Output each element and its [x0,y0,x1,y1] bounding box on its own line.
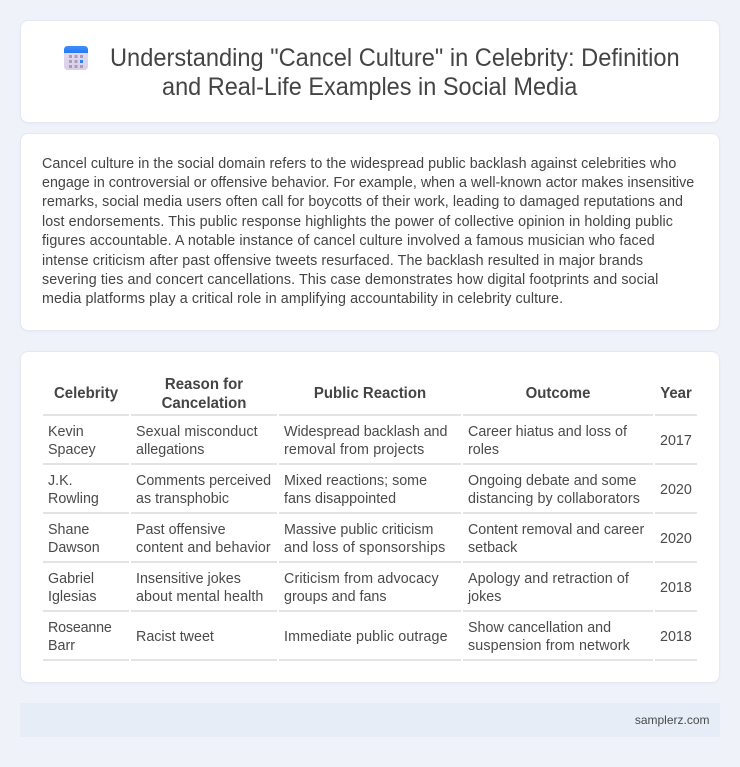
table row: Roseanne Barr: Barr [48,638,75,654]
table row: Roseanne Barr: Immediate public outrage [284,629,448,645]
table row: Roseanne Barr: Racist tweet [136,629,214,645]
table row: Gabriel Iglesias: groups and fans [284,589,387,605]
panel: header [20,20,720,123]
footer [20,703,720,737]
table row: Gabriel Iglesias: about mental health [136,589,264,605]
table row: Shane Dawson [48,522,692,556]
footer credit: samplerz.com [635,713,710,727]
table row: Gabriel Iglesias: Criticism from advocacy [284,571,439,587]
table row: Shane Dawson: Shane [48,522,89,538]
table row: Gabriel Iglesias: Gabriel [48,571,94,587]
table row: Kevin Spacey: Widespread backlash and [284,424,447,440]
panel: description text: severing ties and concert cancellations. This case demonstrates how digital footprints and social [42,272,658,288]
table row: J.K. Rowling: Rowling [48,491,99,507]
table row: Kevin Spacey: Spacey [48,442,96,458]
table header: Cancelation [162,395,246,412]
table row: Shane Dawson: Past offensive [136,522,226,538]
panel: description text [20,133,720,331]
table header: Public Reaction [314,385,426,402]
table row: J.K. Rowling: Mixed reactions; some [284,473,427,489]
table row: Shane Dawson: Massive public criticism [284,522,433,538]
table row: Kevin Spacey: Kevin [48,424,84,440]
table row: J.K. Rowling: distancing by collaborators [468,491,640,507]
panel: description text: intense criticism after past offensive tweets resurfaced. The backlash resulted in major brands [42,253,643,269]
panel: description text: figures accountable. A notable instance of cancel culture involved a famous musician who faced [42,233,655,249]
panel: description text: engage in controversial or offensive behavior. For example, when a well-known actor makes insensitive [42,175,694,191]
panel: description text: remarks, social media users often call for boycotts of their work, leading to damaged reputations and [42,194,683,210]
table row: Shane Dawson: and loss of sponsorships [284,540,445,556]
table row: Gabriel Iglesias: Iglesias [48,589,96,605]
table row: J.K. Rowling [48,473,692,507]
table row: Kevin Spacey: Career hiatus and loss of [468,424,627,440]
title: Understanding "Cancel Culture" in Celebrity: Definition [110,44,680,72]
table row: J.K. Rowling: 2020 [660,482,692,498]
table row: Kevin Spacey: allegations [136,442,204,458]
panel: description text: Cancel culture in the social domain refers to the widespread public backlash against celebrities who [42,156,676,172]
table row: Roseanne Barr: Show cancellation and [468,620,611,636]
table header: Celebrity [54,385,118,402]
table row: Roseanne Barr [48,620,692,654]
title: and Real-Life Examples in Social Media [162,73,577,101]
table row: Roseanne Barr: Roseanne [48,620,112,636]
table row: J.K. Rowling: Ongoing debate and some [468,473,637,489]
table header: Reason for [165,376,243,393]
table row: Kevin Spacey: Sexual misconduct [136,424,258,440]
panel: table [20,351,720,683]
table row: J.K. Rowling: J.K. [48,473,73,489]
table row: Shane Dawson: Content removal and career [468,522,644,538]
table row: Shane Dawson: content and behavior [136,540,271,556]
table header: Year [660,385,692,402]
panel: description text: media platforms play a critical role in amplifying accountability in celebrity culture. [42,291,563,307]
table row: J.K. Rowling: fans disappointed [284,491,396,507]
table header: Outcome [526,385,590,402]
table row: Gabriel Iglesias: jokes [468,589,501,605]
table row: J.K. Rowling: as transphobic [136,491,229,507]
title [110,44,680,101]
table row: Roseanne Barr: 2018 [660,629,692,645]
panel: description text: lost endorsements. This public response highlights the power of collective opinion in holding public [42,214,673,230]
table row: Gabriel Iglesias [48,571,692,605]
table row: Kevin Spacey: 2017 [660,433,692,449]
table row: Gabriel Iglesias: Apology and retraction of [468,571,629,587]
table row: Kevin Spacey [48,424,692,458]
table row: Shane Dawson: 2020 [660,531,692,547]
table row: J.K. Rowling: Comments perceived [136,473,271,489]
table row: Kevin Spacey: roles [468,442,499,458]
table row: Roseanne Barr: suspension from network [468,638,630,654]
table header [54,376,692,412]
icon: calendar [64,46,88,70]
table row: Gabriel Iglesias: 2018 [660,580,692,596]
table row: Shane Dawson: Dawson [48,540,100,556]
table row: Shane Dawson: setback [468,540,517,556]
table row: Gabriel Iglesias: Insensitive jokes [136,571,241,587]
table row: Kevin Spacey: removal from projects [284,442,424,458]
